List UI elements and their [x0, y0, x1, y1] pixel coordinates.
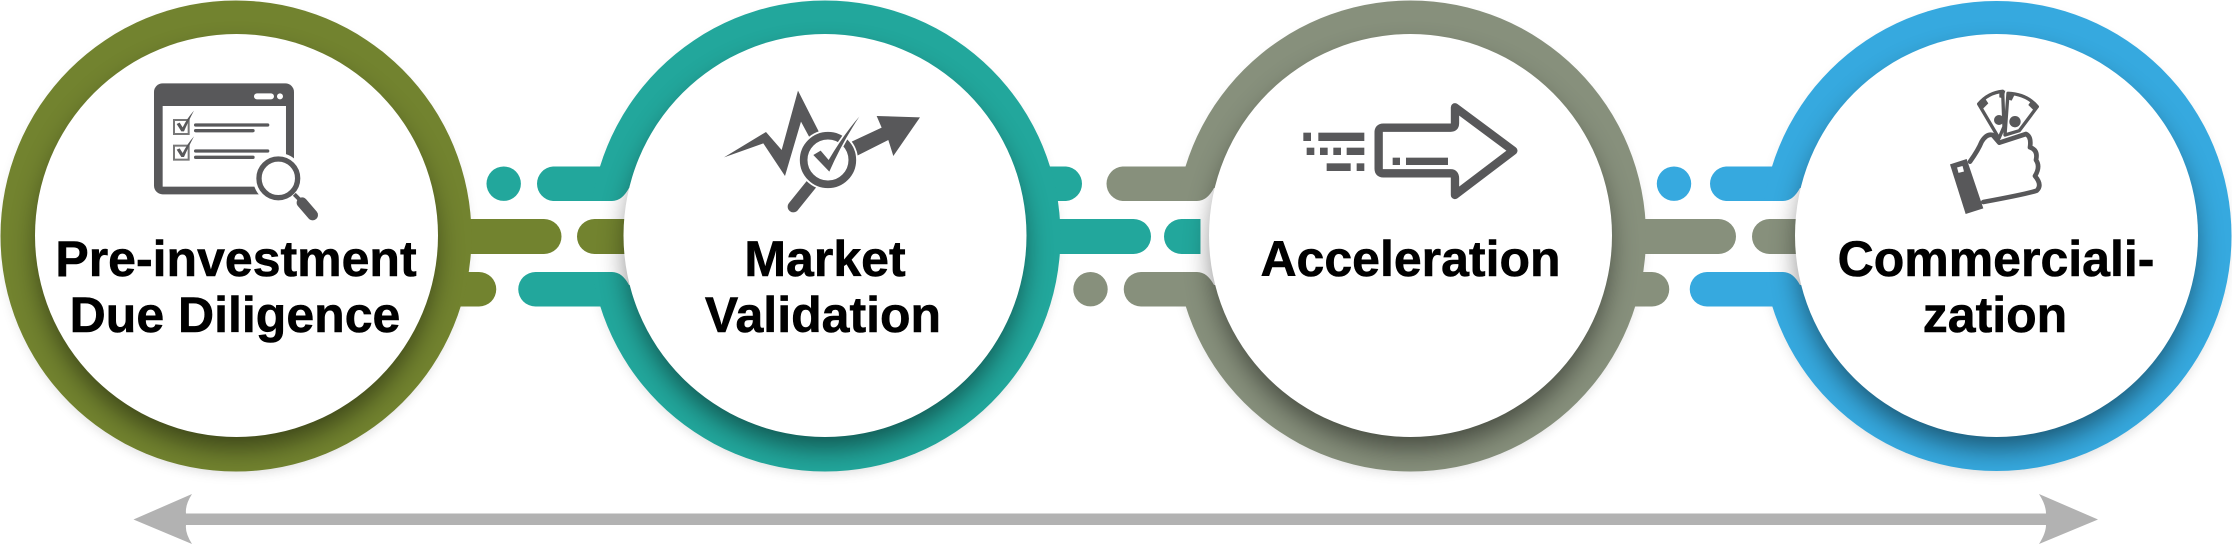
- heading: Pre-investment Due Diligence: Pre-investment: [55, 231, 417, 287]
- heading: Market Validation: Validation: [705, 287, 941, 343]
- connector end: grey: [1752, 219, 1830, 254]
- heading: Acceleration: Acceleration: [1260, 231, 1561, 287]
- heading: Commerciali-zation: zation: [1923, 287, 2067, 343]
- ring: blue: [1762, 1, 2232, 471]
- inner white disc: [1209, 34, 1612, 437]
- ring: grey: [1175, 0, 1646, 472]
- icon: chart arrow with magnifier check: [724, 91, 920, 207]
- icon: checklist window with magnifier: [154, 83, 313, 215]
- connector end: green: [577, 219, 640, 254]
- icon: hand holding money: [1950, 91, 2039, 214]
- ring: teal: [590, 0, 1060, 472]
- connector end: teal: [1164, 219, 1200, 254]
- connector bars: blue: [1657, 166, 1815, 306]
- ring: green: [0, 0, 472, 472]
- connector bars: grey: [1073, 166, 1736, 306]
- heading: Market Validation: Market: [744, 231, 906, 287]
- inner white disc: [624, 34, 1026, 437]
- heading: Pre-investment Due Diligence: Due Diligence: [70, 287, 400, 343]
- inner white disc: [35, 34, 438, 437]
- connector bars: green: [440, 219, 562, 306]
- arrow: double-headed timeline: [134, 494, 2098, 544]
- panel: acceleration: [1073, 0, 1736, 474]
- inner white disc: [1795, 34, 2198, 437]
- connector bars: teal: [486, 166, 1151, 306]
- panel: commercialization: [1657, 1, 2232, 474]
- panel: market validation: [486, 0, 1151, 474]
- panel: pre-investment due diligence: [0, 0, 562, 474]
- heading: Commerciali-zation: Commerciali-: [1838, 231, 2154, 287]
- icon: speeding arrow: [1303, 107, 1513, 195]
